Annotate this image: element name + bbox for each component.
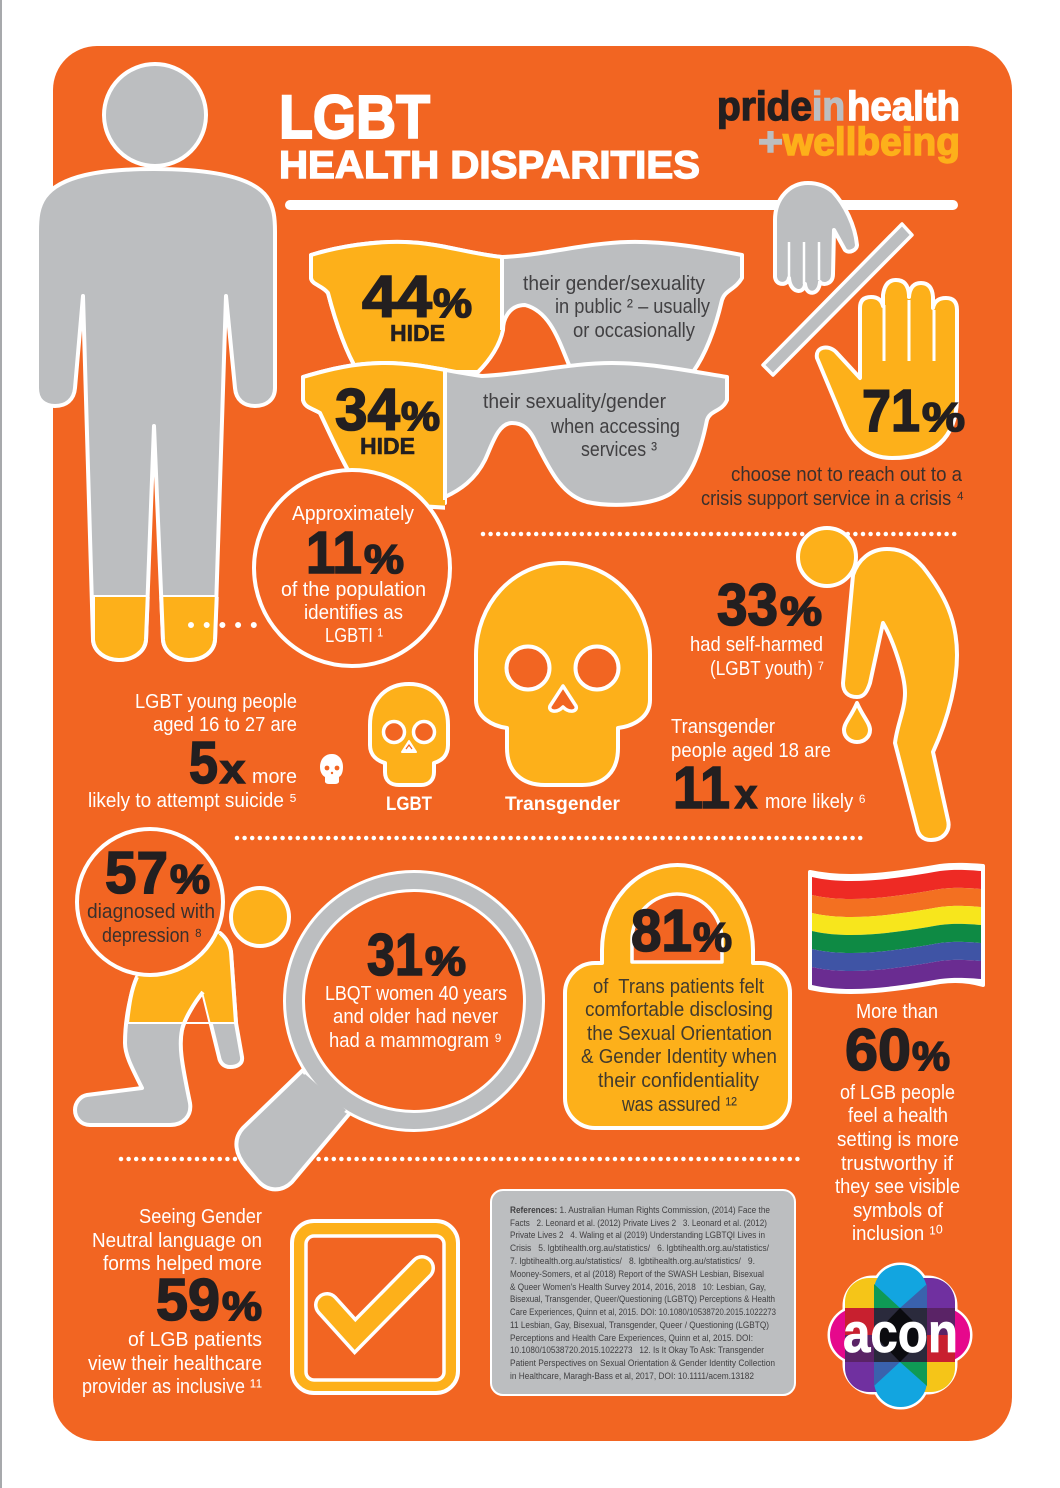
stat: young people 5x: more <box>252 765 297 788</box>
panel: references <box>491 1190 795 1395</box>
text: hide when accessing services: their sexuality/gender <box>483 390 666 413</box>
icon: padlock with 81%: their confidentiality <box>598 1069 760 1092</box>
icon: drop <box>844 703 870 742</box>
callout circle: 57% depression: diagnosed with <box>87 900 215 923</box>
logo: pride in health + wellbeing: wellbeing <box>782 121 960 164</box>
stat: transgender 11x <box>671 715 866 821</box>
label: LGBT: LGBT <box>386 794 432 815</box>
stat: 59% inclusive: % <box>222 1283 262 1329</box>
icon: LGBT skull <box>370 684 448 785</box>
stat: 60% trustworthy: setting is more <box>837 1128 959 1151</box>
stat: 33% self-harmed: (LGBT youth) ⁷ <box>710 657 824 680</box>
stat: young people 5x: LGBT young people <box>135 690 297 713</box>
callout circle: 57% depression: 57 <box>105 840 168 906</box>
panel: references: Perceptions and Health Care Experiences, Quinn et al, 2015. DOI: <box>510 1333 753 1343</box>
callout circle: 11% LGBTI <box>254 470 450 666</box>
logo: pride in health + wellbeing: pride <box>717 83 812 129</box>
icon: slash between hands <box>763 224 912 375</box>
callout circle: 57% depression: % <box>170 856 210 902</box>
icon: checkbox with tick <box>292 1221 458 1393</box>
icon: sunglasses 34% <box>303 363 727 510</box>
stat: 60% trustworthy: of LGB people <box>840 1081 955 1104</box>
panel: references: 11 Lesbian, Gay, Bisexual, Transgender, Queer / Questioning (LGBTQ) <box>510 1320 769 1330</box>
text: hide when accessing services <box>483 390 680 461</box>
stat: young people 5x <box>88 690 297 812</box>
stat: transgender 11x: Transgender <box>671 715 775 738</box>
callout circle: 57% depression: depression ⁸ <box>102 924 202 947</box>
stat: 59% inclusive: view their healthcare <box>88 1352 262 1375</box>
icon: bent figure <box>798 528 957 840</box>
icon: kneeling figure <box>75 888 289 1125</box>
panel: references: Private Lives 2 4. Waling et al (2019) Understanding LGBTQI Lives in <box>510 1230 765 1240</box>
stat: 33% self-harmed: % <box>780 588 822 634</box>
left page edge <box>0 0 2 1488</box>
stat: 71%: % <box>922 394 965 440</box>
stat: young people 5x: x <box>220 746 245 792</box>
callout circle: 11% LGBTI: % <box>364 536 404 582</box>
text: hide in public: in public ² – usually <box>555 295 711 318</box>
stat: 31% mammogram: and older had never <box>333 1005 498 1028</box>
callout circle: 57% depression <box>77 829 223 975</box>
stat: 33% self-harmed: had self-harmed <box>690 633 823 656</box>
text: hide in public: or occasionally <box>573 319 696 342</box>
icon: transgender skull <box>476 563 650 785</box>
title: HEALTH DISPARITIES <box>279 144 700 187</box>
icon: padlock with 81%: of Trans patients felt <box>593 975 764 998</box>
stat: 59% inclusive: Neutral language on <box>92 1229 262 1252</box>
stat: 60% trustworthy: % <box>912 1033 950 1079</box>
stat: 33% self-harmed <box>690 572 824 680</box>
stat: 31% mammogram: % <box>425 938 466 984</box>
stat: 31% mammogram: LBQT women 40 years <box>325 982 507 1005</box>
panel: references: & Queer Women's Health Survey 2014, 2016, 2018 10: Lesbian, Gay, <box>510 1282 766 1292</box>
panel: references: References: 1. Australian Human Rights Commission, (2014) Face the <box>510 1205 770 1215</box>
stat: 44% hide: 44 <box>362 264 432 330</box>
text: hide when accessing services: when accessing <box>550 415 680 438</box>
callout circle: 11% LGBTI: of the population <box>281 578 426 601</box>
dotted connector from feet to circle <box>191 622 256 628</box>
stat: 34% hide: HIDE <box>360 433 415 459</box>
icon: padlock with 81%: the Sexual Orientation <box>587 1022 772 1045</box>
text: hide in public <box>523 272 711 342</box>
logo: pride in health + wellbeing: health <box>847 83 960 129</box>
stat: 33% self-harmed: 33 <box>717 572 778 638</box>
logo: acon: acon <box>843 1301 958 1364</box>
icon: rainbow flag <box>810 865 983 992</box>
icon: standing person with yellow feet <box>37 64 275 660</box>
stat: 59% inclusive: Seeing Gender <box>139 1205 262 1228</box>
callout circle: 11% LGBTI: Approximately <box>292 502 415 525</box>
stat: transgender 11x: people aged 18 are <box>671 739 831 762</box>
text: crisis support: choose not to reach out to a <box>731 463 963 486</box>
stat: young people 5x: 5 <box>189 730 218 796</box>
icon: tiny white skull <box>320 754 343 784</box>
icon: padlock with 81%: % <box>693 914 732 960</box>
stat: 44% hide: HIDE <box>390 320 445 346</box>
icon: yellow raised hand <box>817 280 957 458</box>
stat: 59% inclusive: 59 <box>156 1267 220 1333</box>
panel: references: Care Experiences, Quinn et al, 2015. DOI: 10.1080/10538720.2015.1022273 <box>510 1307 776 1317</box>
stat: young people 5x: likely to attempt suicide ⁵ <box>88 789 297 812</box>
panel: references: in Healthcare, Maragh-Bass et al, 2017, DOI: 10.1111/acem.13182 <box>510 1371 754 1381</box>
logo: pride in health + wellbeing: + <box>758 120 783 164</box>
stat: 31% mammogram: 31 <box>367 922 423 988</box>
stat: 60% trustworthy: feel a health <box>848 1104 948 1127</box>
stat: 60% trustworthy: they see visible <box>835 1175 960 1198</box>
icon: padlock with 81%: & Gender Identity when <box>581 1045 777 1068</box>
text: crisis support <box>701 463 964 510</box>
stat: 31% mammogram <box>325 922 507 1052</box>
logo: pride in health + wellbeing: in <box>812 83 845 129</box>
stat: 44% hide <box>362 264 472 346</box>
icon: padlock with 81%: was assured ¹² <box>621 1093 737 1116</box>
icon: padlock with 81% <box>565 865 790 1128</box>
callout circle: 11% LGBTI: LGBTI ¹ <box>325 624 383 647</box>
stat: 60% trustworthy: More than <box>856 1000 938 1023</box>
stat: 59% inclusive: provider as inclusive ¹¹ <box>82 1375 262 1398</box>
title: LGBT <box>279 83 430 151</box>
panel: references: Mooney-Somers, et al (2018) Report of the SWASH Lesbian, Bisexual <box>510 1269 764 1279</box>
panel: references: 7. lgbtihealth.org.au/statistics/ 8. lgbtihealth.org.au/statistics/ 9. <box>510 1256 755 1266</box>
icon: padlock with 81%: comfortable disclosing <box>585 998 773 1021</box>
stat: 60% trustworthy: symbols of <box>853 1199 943 1222</box>
stat: 59% inclusive: of LGB patients <box>128 1328 262 1351</box>
icon: padlock with 81%: 81 <box>631 898 692 964</box>
stat: 60% trustworthy: 60 <box>845 1017 911 1083</box>
stat: 34% hide <box>335 377 440 459</box>
text: hide when accessing services: services ³ <box>581 438 657 461</box>
stat: 31% mammogram: had a mammogram ⁹ <box>329 1029 502 1052</box>
stat: transgender 11x: more likely ⁶ <box>765 790 866 813</box>
stat: 34% hide: % <box>401 393 440 439</box>
stat: 71%: 71 <box>862 378 920 444</box>
title rule <box>285 200 958 210</box>
icon: sunglasses 44% <box>311 242 742 372</box>
stat: 71% <box>862 378 965 444</box>
stat: 59% inclusive <box>82 1205 262 1398</box>
panel: references: Patient Perspectives on Sexual Orientation & Gender Identity Collection <box>510 1358 775 1368</box>
icon: hand reaching down <box>775 183 857 293</box>
panel: references: Facts 2. Leonard et al. (2012) Private Lives 2 3. Leonard et al. (2012) <box>510 1218 767 1228</box>
stat: transgender 11x: x <box>735 771 757 817</box>
panel: references: 10.1080/10538720.2015.1022273 12. Is It Okay To Ask: Transgender <box>510 1345 764 1355</box>
title <box>279 83 700 187</box>
text: hide in public: their gender/sexuality <box>523 272 706 295</box>
callout circle: 11% LGBTI: 11 <box>306 520 362 586</box>
stat: 44% hide: % <box>433 280 472 326</box>
label: Transgender: Transgender <box>505 794 621 815</box>
stat: 34% hide: 34 <box>335 377 400 443</box>
stat: 60% trustworthy: trustworthy if <box>841 1152 953 1175</box>
logo: acon <box>830 1265 970 1407</box>
callout circle: 11% LGBTI: identifies as <box>304 601 403 624</box>
icon: magnifying glass <box>236 881 534 1189</box>
stat: 60% trustworthy <box>835 1000 960 1245</box>
panel: references: Bisexual, Transgender, Queer/Questioning (LGBTQ) Perceptions & Health <box>510 1294 775 1304</box>
stat: young people 5x: aged 16 to 27 are <box>153 713 297 736</box>
logo: pride in health + wellbeing <box>717 83 960 164</box>
stat: 60% trustworthy: inclusion ¹⁰ <box>852 1222 943 1245</box>
stat: transgender 11x: 11 <box>673 755 730 821</box>
stat: 59% inclusive: forms helped more <box>103 1252 262 1275</box>
text: crisis support: crisis support service in a crisis ⁴ <box>701 487 964 510</box>
panel: references: Crisis 5. lgbtihealth.org.au/statistics/ 6. lgbtihealth.org.au/statistics/ <box>510 1243 769 1253</box>
